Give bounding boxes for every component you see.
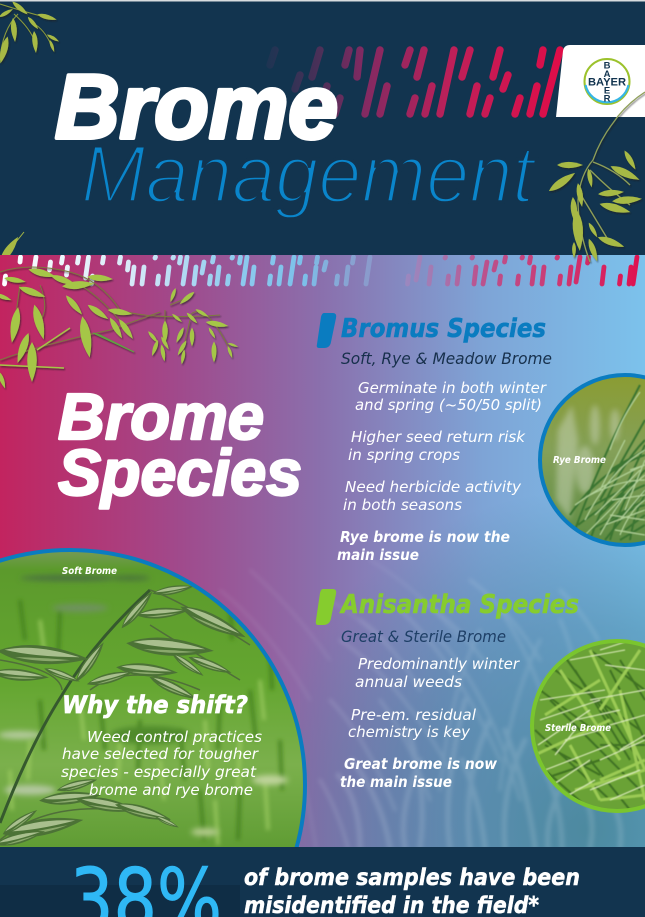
Bayer logo [584, 59, 630, 104]
text block: anisantha facts: the main issue [340, 773, 452, 791]
grass texture [320, 580, 624, 847]
Bayer logo: R [604, 94, 611, 104]
dash pattern [270, 50, 560, 114]
callout: why the shift: Why the shift? [62, 691, 248, 719]
text block: bromus facts: and spring (~50/50 split) [355, 396, 542, 414]
title: Brome: Brome [55, 57, 338, 158]
photo: sterile brome [530, 640, 645, 815]
callout: why the shift: have selected for tougher [62, 745, 260, 763]
heading: Anisantha Species: Anisantha Species [339, 590, 579, 620]
statement text [244, 865, 580, 917]
text block: anisantha facts: chemistry is key [348, 723, 471, 741]
text block: bromus facts: Need herbicide activity [345, 478, 522, 496]
subheading: Great & Sterile Brome [341, 627, 506, 646]
text block: anisantha facts: annual weeds [355, 673, 462, 691]
footer panel [0, 847, 645, 917]
marker: green [316, 589, 336, 625]
text block: anisantha facts: Predominantly winter [358, 655, 521, 673]
heading: Brome Species [58, 380, 302, 509]
panel: Bromus species [317, 313, 645, 564]
text block: bromus facts: in both seasons [343, 496, 462, 514]
callout: why the shift [61, 691, 262, 799]
panel: Anisantha species [316, 589, 645, 815]
title: Management: Management [81, 129, 537, 220]
dash strip [4, 257, 637, 284]
Bayer logo: E [604, 86, 610, 96]
sprig: header right [547, 92, 645, 262]
text block: bromus facts: Germinate in both winter [358, 379, 548, 397]
sprig: bottom left corner [0, 232, 24, 265]
Bayer logo: A [604, 69, 611, 80]
header panel [0, 0, 645, 265]
sprig: species panel [0, 266, 239, 389]
sprig: top left [0, 0, 60, 64]
text block: anisantha facts: Great brome is now [344, 755, 498, 773]
logo panel [556, 45, 645, 117]
callout: why the shift: Weed control practices [87, 728, 262, 746]
Bayer logo: B [604, 60, 611, 72]
text block: bromus facts [337, 379, 548, 564]
label: sterile brome: Sterile Brome [545, 723, 611, 734]
photo: soft brome [0, 548, 307, 847]
heading: Brome Species: Species [58, 436, 302, 509]
text block: bromus facts: main issue [337, 546, 419, 564]
heading: Bromus Species: Bromus Species [341, 314, 546, 344]
marker: blue [317, 313, 336, 348]
text block: anisantha facts [340, 655, 521, 791]
text block: bromus facts: Higher seed return risk [351, 428, 526, 446]
statement text: of brome samples have been [244, 865, 580, 891]
text block: bromus facts: in spring crops [348, 446, 460, 464]
label: soft brome: Soft Brome [62, 566, 117, 577]
species panel background [0, 255, 645, 847]
heading: Brome Species: Brome [58, 380, 264, 453]
label: rye brome: Rye Brome [553, 455, 607, 466]
Bayer logo: BAYER [588, 76, 626, 88]
callout: why the shift: species - especially great [61, 763, 257, 781]
callout: why the shift: brome and rye brome [89, 781, 253, 799]
text block: anisantha facts: Pre-em. residual [351, 706, 477, 724]
text block: bromus facts: Rye brome is now the [340, 528, 510, 546]
subheading: Soft, Rye & Meadow Brome [341, 349, 552, 368]
photo: rye brome [535, 370, 645, 550]
